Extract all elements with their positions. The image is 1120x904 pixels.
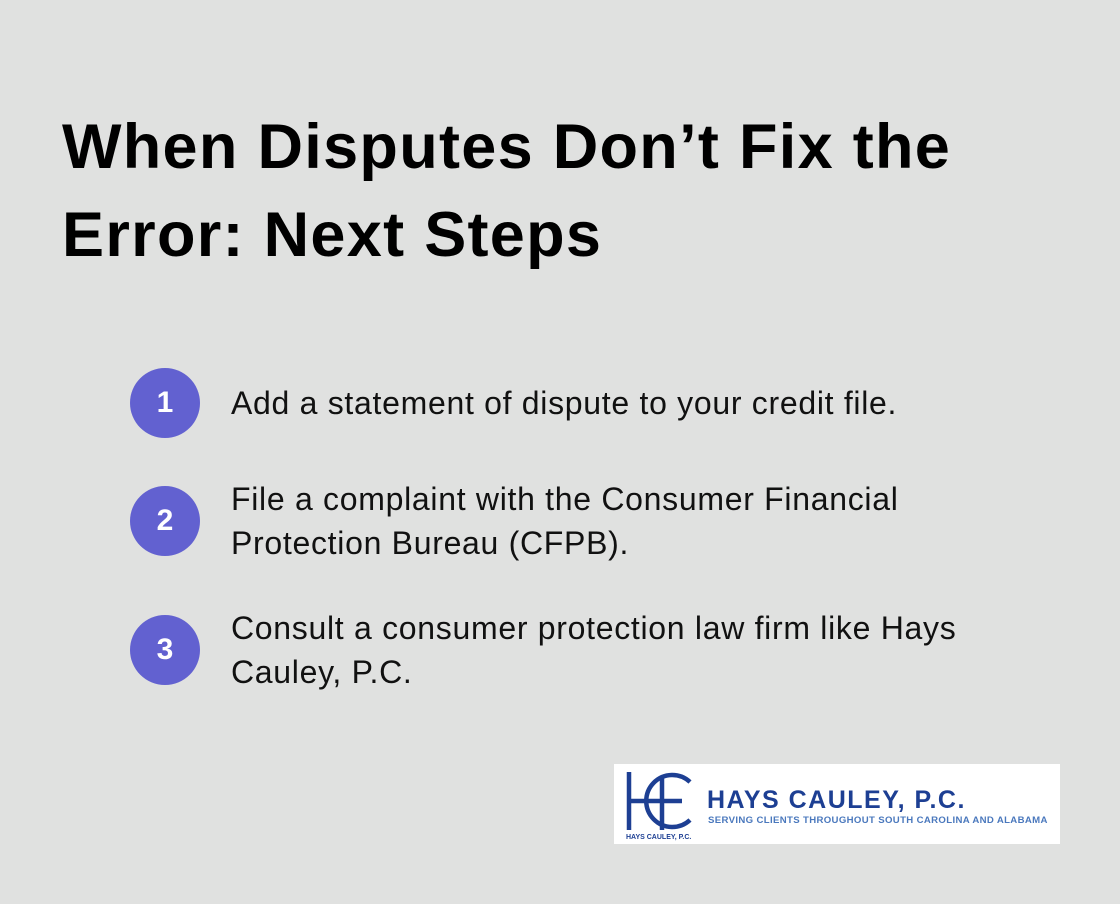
text 3 — [231, 610, 956, 690]
step 2 — [130, 481, 899, 561]
title: Error: Next Steps — [62, 200, 602, 270]
text 2 — [231, 481, 899, 561]
circle 2: 2 — [157, 504, 173, 537]
text 1: Add a statement of dispute to your credit file. — [231, 385, 897, 421]
circle 1 — [130, 368, 200, 438]
title: When Disputes Don’t Fix the — [62, 112, 951, 182]
text 3: Consult a consumer protection law firm like Hays — [231, 610, 956, 646]
circle 2 — [130, 486, 200, 556]
logo — [614, 764, 1060, 844]
circle 3 — [130, 615, 200, 685]
logo tagline: SERVING CLIENTS THROUGHOUT SOUTH CAROLINA AND ALABAMA — [708, 815, 1048, 826]
logo small text: HAYS CAULEY, P.C. — [626, 834, 691, 841]
text 2: File a complaint with the Consumer Financial — [231, 481, 899, 517]
circle 3: 3 — [157, 633, 173, 666]
circle 1: 1 — [157, 386, 173, 419]
title — [62, 112, 951, 270]
text 3: Cauley, P.C. — [231, 654, 413, 690]
logo icon — [626, 772, 692, 830]
logo name: HAYS CAULEY, P.C. — [707, 786, 966, 814]
step 3 — [130, 610, 956, 690]
step 1 — [130, 368, 897, 438]
text 2: Protection Bureau (CFPB). — [231, 525, 629, 561]
